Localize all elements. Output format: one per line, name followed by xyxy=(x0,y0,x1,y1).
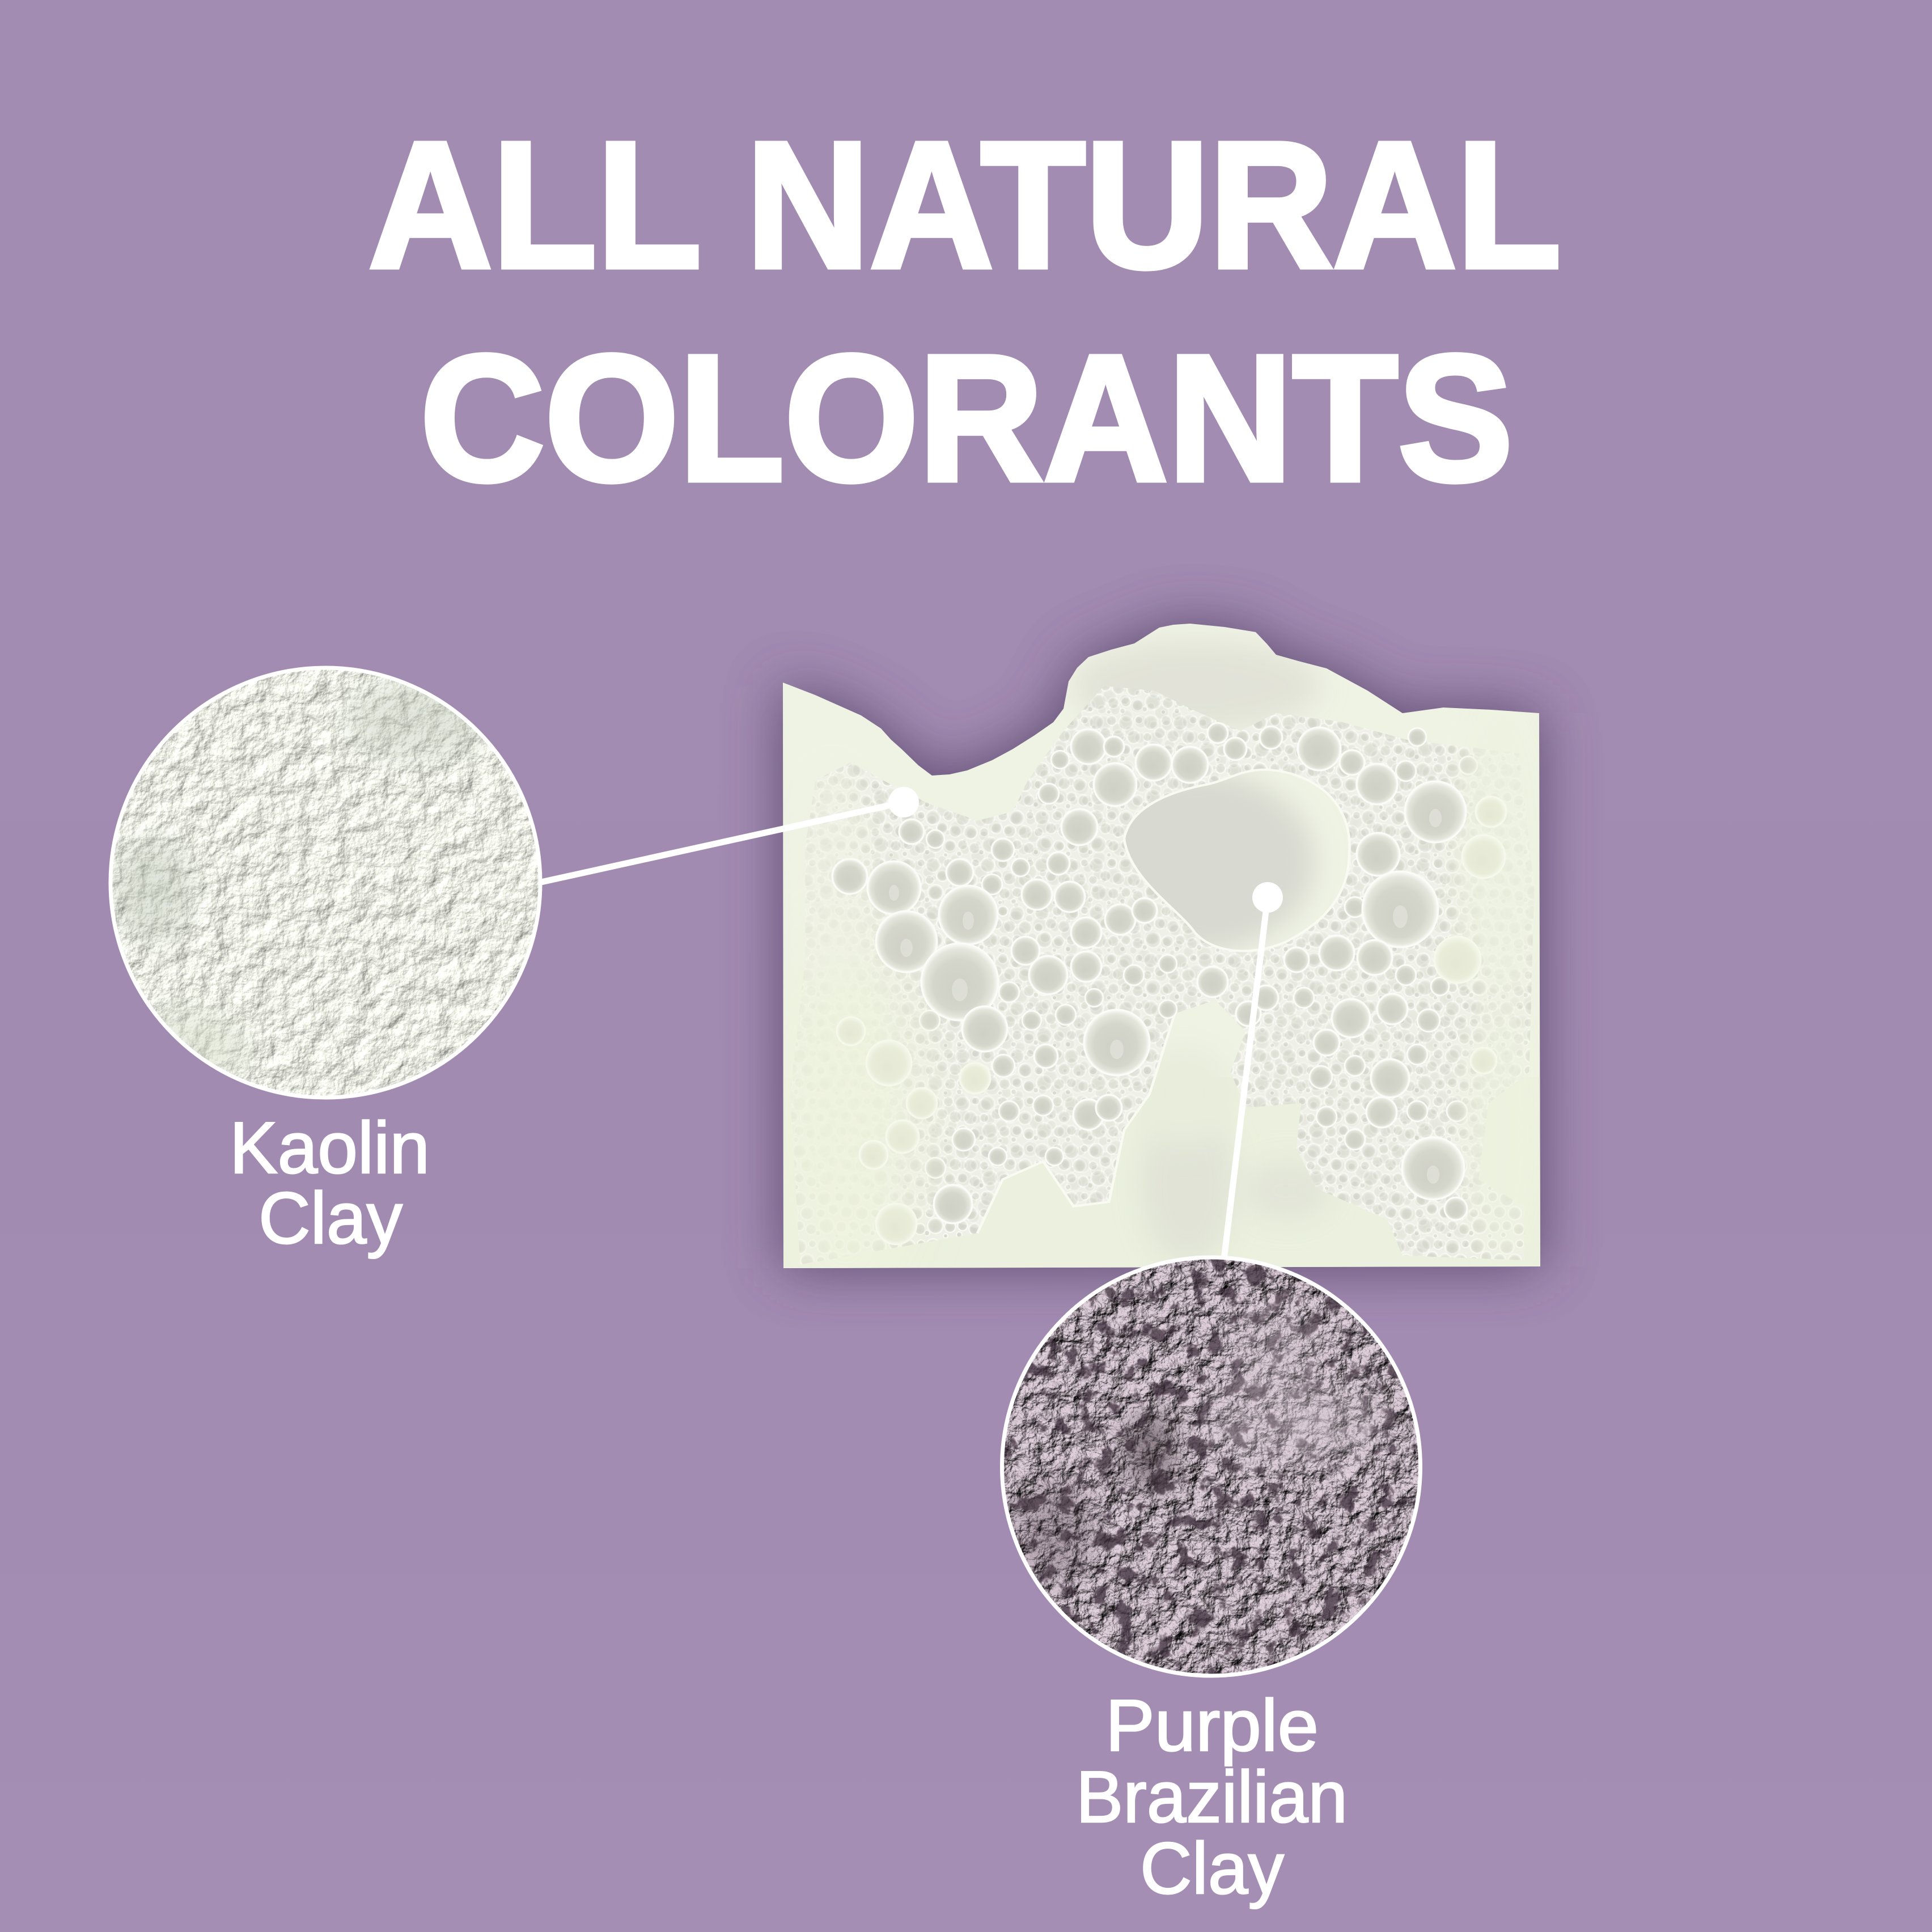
bubble highlights xyxy=(889,809,1442,1184)
label: purple brazilian clay: Clay xyxy=(1140,1828,1284,1909)
soap bar photo xyxy=(783,624,1540,1268)
label: kaolin clay: Kaolin xyxy=(230,1107,430,1189)
label: purple brazilian clay: Purple xyxy=(1105,1685,1319,1766)
callout line: purple brazilian clay xyxy=(1223,882,1283,1264)
soap body xyxy=(783,624,1540,1268)
pale bubbles at the edges xyxy=(837,796,1506,1244)
foam edge sheen xyxy=(977,770,1350,1233)
purple brazilian clay powder circle xyxy=(998,1253,1426,1681)
label: purple brazilian clay: Brazilian xyxy=(1076,1756,1348,1838)
title: ALL NATURAL xyxy=(368,105,1561,306)
soap tonal marbling xyxy=(782,641,1542,1270)
label: kaolin clay xyxy=(230,1107,430,1259)
pale fade over foam edges xyxy=(765,697,1548,1304)
large bubbles xyxy=(832,723,1467,1223)
medium bubbles xyxy=(920,728,1477,1178)
kaolin clay powder circle xyxy=(108,663,544,1103)
title xyxy=(368,105,1561,519)
title: COLORANTS xyxy=(420,318,1513,519)
label: purple brazilian clay xyxy=(1076,1685,1348,1909)
callout line: kaolin clay xyxy=(539,787,919,883)
soap drop shadow xyxy=(783,624,1540,1268)
label: kaolin clay: Clay xyxy=(259,1177,402,1259)
foam bubbles field xyxy=(797,687,1534,1264)
